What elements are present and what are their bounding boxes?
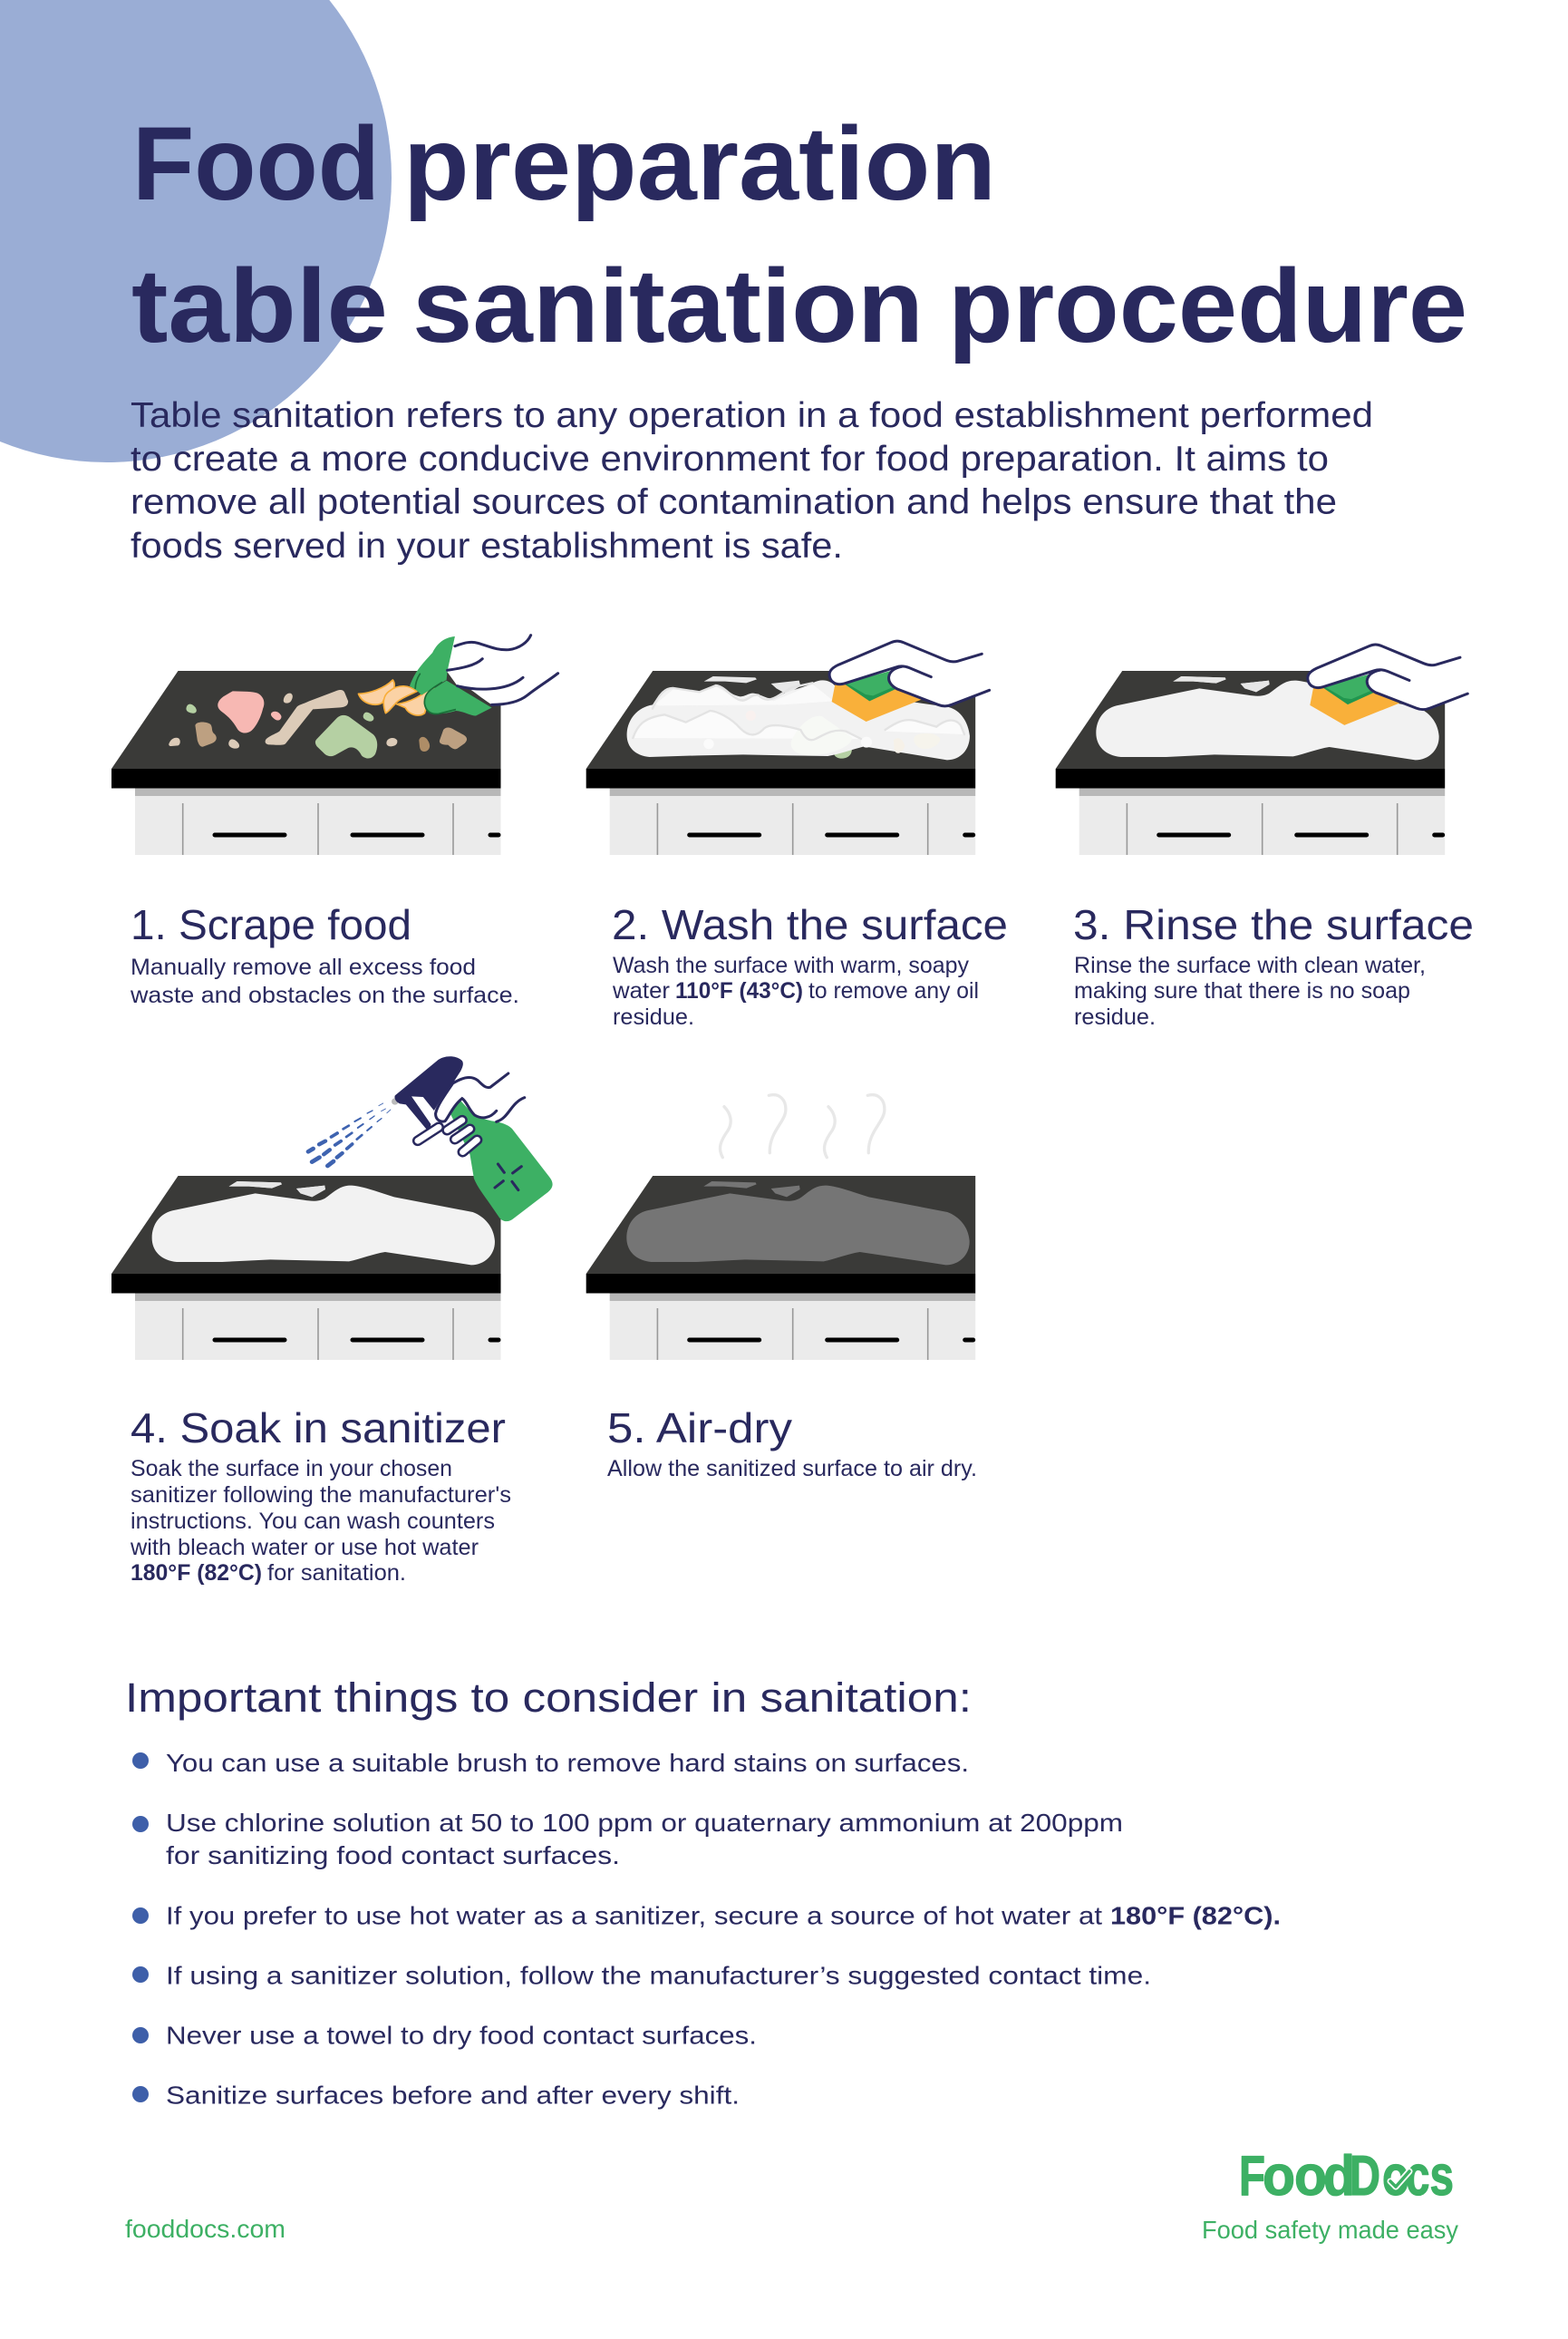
illustration: step 4 soak in sanitizer — [111, 1056, 553, 1360]
orange peels — [358, 680, 434, 715]
title: Food — [132, 106, 380, 222]
food scraps — [169, 690, 467, 758]
logo: o — [1263, 2145, 1295, 2208]
logo: D — [1350, 2145, 1380, 2208]
bullet 3: 180°F (82°C). — [1110, 1902, 1281, 1929]
logo: o — [1294, 2145, 1327, 2208]
step 3 text: 3. Rinse the surface — [1073, 901, 1474, 948]
title: table — [131, 248, 388, 364]
bottle — [450, 1101, 553, 1221]
step 1 text — [130, 901, 519, 1008]
footer url: fooddocs.com — [125, 2215, 286, 2243]
step 4 text: instructions. You can wash counters — [131, 1509, 495, 1534]
bullet 2: for sanitizing food contact surfaces. — [166, 1841, 620, 1869]
step 4 text — [130, 1404, 511, 1586]
bullet 6: Sanitize surfaces before and after every shift. — [166, 2082, 740, 2109]
title — [131, 106, 1467, 364]
step 2 text: to remove any oil — [808, 978, 979, 1004]
step 3 text: making sure that there is no soap — [1074, 978, 1410, 1004]
spray head — [394, 1056, 463, 1132]
hand — [418, 1073, 525, 1152]
intro paragraph — [131, 396, 1373, 566]
step 3 text: residue. — [1074, 1005, 1156, 1030]
hand white fill — [447, 671, 503, 704]
intro paragraph: foods served in your establishment is safe. — [131, 527, 843, 566]
logo — [1239, 2145, 1454, 2208]
intro paragraph: remove all potential sources of contamination and helps ensure that the — [131, 482, 1337, 522]
step 1 text: waste and obstacles on the surface. — [130, 983, 519, 1008]
intro paragraph: to create a more conducive environment for food preparation. It aims to — [131, 440, 1329, 479]
step 5 text: Allow the sanitized surface to air dry. — [607, 1456, 977, 1481]
tagline: Food safety made easy — [1202, 2216, 1458, 2244]
green cloth — [410, 636, 492, 716]
step 4 text: 180°F (82°C) — [131, 1560, 262, 1586]
step 2 text: water — [612, 978, 670, 1004]
step 5 text — [607, 1404, 977, 1481]
step 4 text: for sanitation. — [267, 1560, 406, 1586]
step 2 text: Wash the surface with warm, soapy — [613, 953, 969, 978]
bullet 2: Use chlorine solution at 50 to 100 ppm or quaternary ammonium at 200ppm — [166, 1809, 1123, 1837]
sponge and hand — [829, 641, 991, 722]
logo: cs — [1406, 2145, 1454, 2208]
step 4 text: Soak the surface in your chosen — [131, 1456, 452, 1481]
title: preparation — [403, 106, 996, 222]
title: procedure — [948, 248, 1467, 364]
bullet list — [132, 1749, 1281, 2109]
bullet 2 — [132, 1809, 1123, 1869]
illustration: step 3 rinse the surface — [1056, 645, 1469, 855]
illustration: step 5 air-dry — [586, 1095, 975, 1360]
step 4 text: 4. Soak in sanitizer — [131, 1404, 506, 1451]
logo: F — [1239, 2145, 1265, 2208]
step 4 text: with bleach water or use hot water — [130, 1535, 479, 1560]
step 5 text: 5. Air-dry — [607, 1404, 792, 1451]
step 2 text: residue. — [613, 1005, 694, 1030]
step 3 text — [1073, 901, 1474, 1030]
title: sanitation — [412, 248, 924, 364]
step 1 text: 1. Scrape food — [131, 901, 411, 948]
step 1 text: Manually remove all excess food — [131, 955, 476, 980]
spray droplets — [308, 1103, 391, 1166]
bullet 4: If using a sanitizer solution, follow the manufacturer’s suggested contact time. — [166, 1962, 1151, 1989]
logo: d — [1323, 2145, 1355, 2208]
step 2 text: 2. Wash the surface — [612, 901, 1008, 948]
bullet 1: You can use a suitable brush to remove hard stains on surfaces. — [166, 1749, 969, 1777]
sponge and hand — [1308, 645, 1469, 725]
illustration: step 1 scrape food — [111, 636, 558, 855]
illustration: step 2 wash the surface — [586, 641, 991, 855]
icon: check mark — [1390, 2171, 1409, 2187]
intro paragraph: Table sanitation refers to any operation in a food establishment performed — [131, 396, 1373, 435]
step 2 text: 110°F (43°C) — [675, 978, 803, 1004]
steam — [720, 1095, 885, 1158]
step 4 text: sanitizer following the manufacturer's — [131, 1482, 511, 1508]
heading: important things: Important things to consider in sanitation: — [125, 1674, 972, 1721]
soap foam — [627, 676, 970, 760]
logo: o — [1382, 2145, 1409, 2208]
bullet 3: If you prefer to use hot water as a sanitizer, secure a source of hot water at — [166, 1902, 1102, 1929]
step 2 text — [612, 901, 1008, 1030]
nozzle — [392, 1098, 399, 1105]
decorative circle — [0, 0, 392, 462]
step 3 text: Rinse the surface with clean water, — [1074, 953, 1426, 978]
hand outline — [448, 636, 558, 704]
bullet 5: Never use a towel to dry food contact surfaces. — [166, 2022, 757, 2049]
